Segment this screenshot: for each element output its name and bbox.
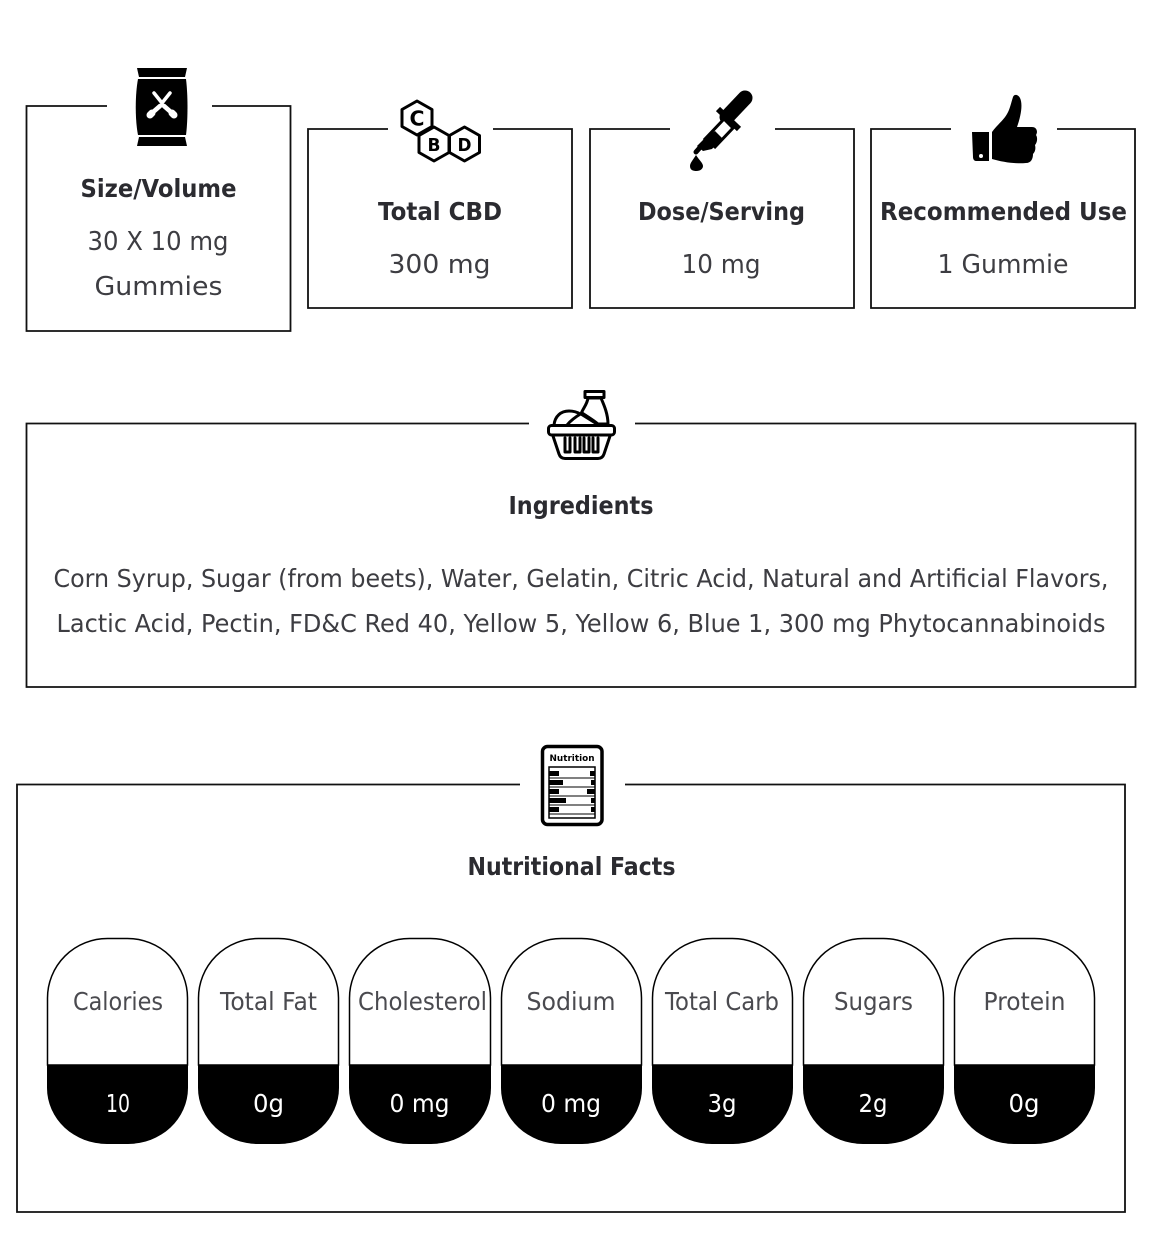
heading: recommended use: Recommended Use	[880, 197, 1127, 226]
pill: sodium	[501, 938, 642, 1144]
icon: cbd hexagons: B	[428, 135, 440, 156]
icon: gummies bag	[136, 68, 188, 146]
heading: ingredients: Ingredients	[508, 491, 654, 520]
icon: thumbs up	[972, 95, 1037, 163]
value: 30 x 10 mg gummies: Gummies	[94, 272, 222, 302]
pill: total fat	[198, 938, 339, 1144]
icon: dropper	[690, 98, 745, 171]
panel: total cbd	[308, 101, 572, 308]
pill: protein: Protein	[984, 987, 1066, 1016]
pill: sugars: Sugars	[834, 987, 913, 1016]
value: 300 mg: 300 mg	[388, 250, 490, 280]
icon: nutrition label: Nutrition	[550, 754, 594, 764]
ingredients text	[54, 564, 1108, 638]
pill: total carb: Total Carb	[664, 987, 779, 1016]
pill: sugars	[803, 938, 944, 1144]
icon: cbd hexagons: C	[410, 106, 424, 130]
value: 30 x 10 mg gummies	[88, 227, 228, 302]
pill: total fat: 0g	[253, 1089, 284, 1118]
heading: dose/serving: Dose/Serving	[638, 197, 805, 226]
icon: cbd hexagons	[402, 101, 480, 161]
pill: total carb	[652, 938, 793, 1144]
pill: sugars: 2g	[858, 1089, 888, 1118]
icon: grocery basket	[548, 392, 614, 458]
pill: calories: 10	[106, 1089, 130, 1118]
panel: recommended use	[871, 95, 1135, 308]
pill: protein: 0g	[1008, 1089, 1040, 1118]
pill: cholesterol	[349, 938, 491, 1144]
value: 10 mg: 10 mg	[682, 250, 760, 280]
panel: nutritional facts	[17, 746, 1125, 1212]
pill: cholesterol: Cholesterol	[358, 987, 487, 1016]
heading: nutritional facts: Nutritional Facts	[468, 852, 676, 881]
heading: size/volume: Size/Volume	[80, 174, 236, 203]
panel: size/volume	[26, 68, 290, 331]
ingredients text: Corn Syrup, Sugar (from beets), Water, Gelatin, Citric Acid, Natural and Artificial Flavors,	[54, 564, 1108, 593]
pill: total fat: Total Fat	[219, 987, 317, 1016]
pill: total carb: 3g	[708, 1089, 736, 1118]
pill: protein	[954, 938, 1095, 1144]
pill: calories	[47, 938, 188, 1144]
icon: nutrition label	[542, 746, 602, 824]
pill: cholesterol: 0 mg	[390, 1089, 450, 1118]
heading: total cbd: Total CBD	[378, 197, 502, 226]
value: 30 x 10 mg gummies: 30 X 10 mg	[88, 227, 228, 257]
icon: cbd hexagons: D	[458, 135, 472, 156]
panel: ingredients	[26, 392, 1136, 687]
panel: dose/serving	[590, 98, 854, 308]
ingredients text: Lactic Acid, Pectin, FD&C Red 40, Yellow 5, Yellow 6, Blue 1, 300 mg Phytocannabinoids	[56, 609, 1106, 638]
pill: sodium: 0 mg	[541, 1089, 601, 1118]
pill: calories: Calories	[73, 987, 163, 1016]
value: 1 gummie: 1 Gummie	[938, 250, 1068, 280]
pill: sodium: Sodium	[526, 987, 616, 1016]
